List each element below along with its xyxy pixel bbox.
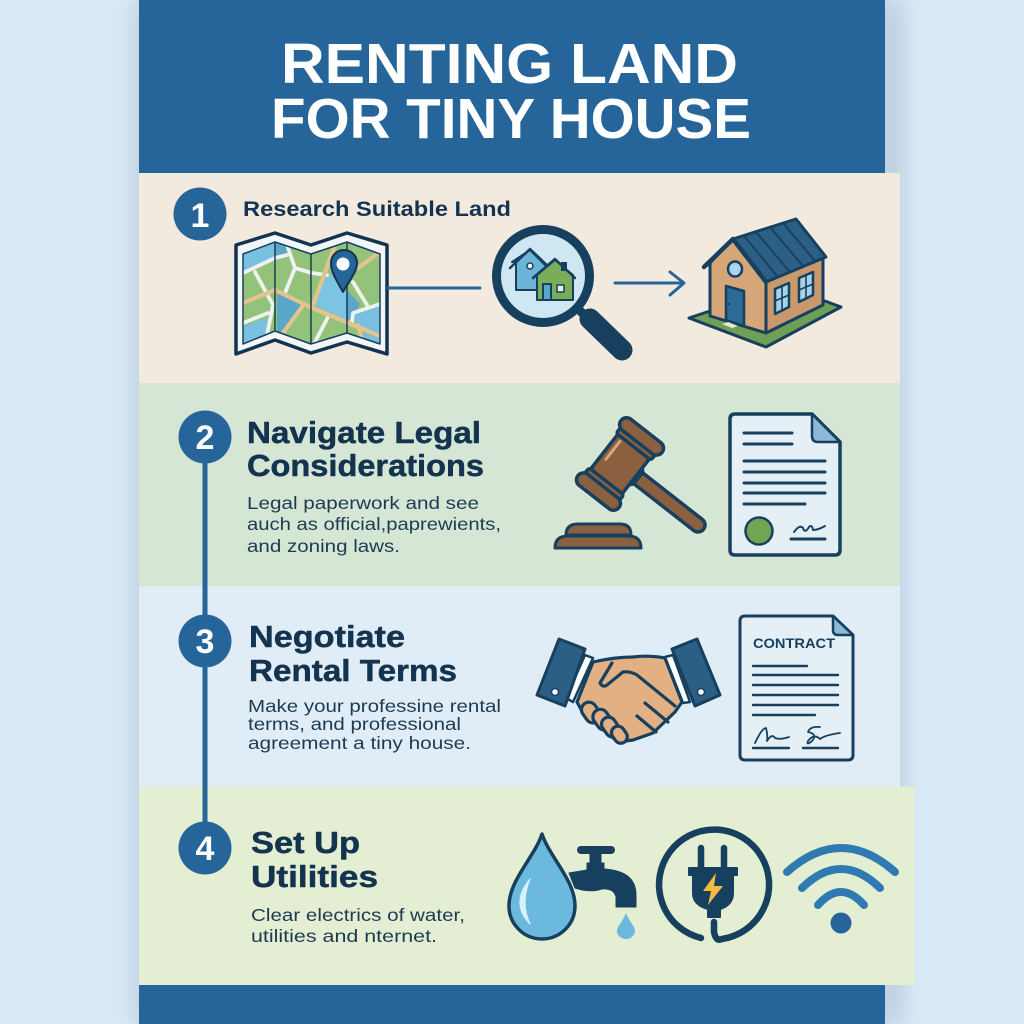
- icon: legal document: [730, 414, 840, 555]
- arrow: [615, 272, 684, 295]
- step 2 body text: [247, 493, 501, 556]
- step 3 heading: Negotiate: [249, 619, 405, 654]
- step 3 badge: 3: [196, 623, 214, 661]
- icon: contract: [740, 616, 853, 760]
- step 3 heading: Rental Terms: [249, 653, 457, 688]
- icon: handshake: [537, 639, 720, 746]
- step 4 badge: 4: [196, 830, 215, 868]
- step 4 body text: [251, 905, 465, 946]
- step 2 heading: Navigate Legal: [247, 415, 481, 450]
- icon: faucet: [569, 850, 636, 939]
- step 3 body text: agreement a tiny house.: [248, 733, 471, 753]
- icon: wifi: [787, 848, 895, 934]
- step 2 badge: [178, 410, 232, 464]
- icon: power plug: [659, 830, 769, 940]
- icon: gavel: [555, 415, 729, 562]
- step 3 body text: Make your professine rental: [248, 696, 501, 716]
- icon: folded map: [236, 232, 387, 354]
- step 4 heading: Utilities: [251, 859, 378, 894]
- icon: contract: CONTRACT: [753, 635, 835, 651]
- icon: magnifier: [496, 230, 622, 350]
- step 2 heading: [247, 415, 484, 483]
- bottom band: [139, 985, 885, 1024]
- panel: step 2 legal: [139, 383, 900, 586]
- step 2 body text: Legal paperwork and see: [247, 493, 479, 513]
- step 1 heading: Research Suitable Land: [243, 198, 511, 221]
- step 2 body text: and zoning laws.: [247, 536, 400, 556]
- step 1 badge: [174, 188, 226, 240]
- header band: [139, 0, 885, 173]
- step 3 body text: [248, 696, 501, 753]
- step 4 heading: Set Up: [251, 825, 360, 860]
- icon: water drop: [509, 834, 575, 939]
- step 3 body text: terms, and professional: [248, 714, 461, 734]
- panel: step 1 research: [139, 173, 900, 383]
- timeline connector: [202, 437, 208, 848]
- step 2 badge: 2: [196, 419, 214, 457]
- step 4 heading: [251, 825, 378, 894]
- step 4 body text: utilities and nternet.: [251, 926, 437, 946]
- title: FOR TINY HOUSE: [271, 87, 751, 151]
- icon: tiny house: [689, 219, 841, 347]
- step 2 body text: auch as official,paprewients,: [247, 514, 501, 534]
- connector line: [388, 286, 480, 290]
- icon: location pin: [331, 250, 357, 292]
- step 2 heading: Considerations: [247, 448, 484, 483]
- panel: step 4 utilities: [139, 787, 915, 985]
- step 4 body text: Clear electrics of water,: [251, 905, 465, 925]
- title: RENTING LAND: [281, 32, 738, 96]
- title: [271, 32, 751, 151]
- step 1 badge: 1: [191, 197, 209, 235]
- step 3 heading: [249, 619, 457, 688]
- step 3 badge: [178, 614, 232, 668]
- step 4 badge: [178, 822, 232, 874]
- panel: step 3 negotiate: [139, 586, 900, 787]
